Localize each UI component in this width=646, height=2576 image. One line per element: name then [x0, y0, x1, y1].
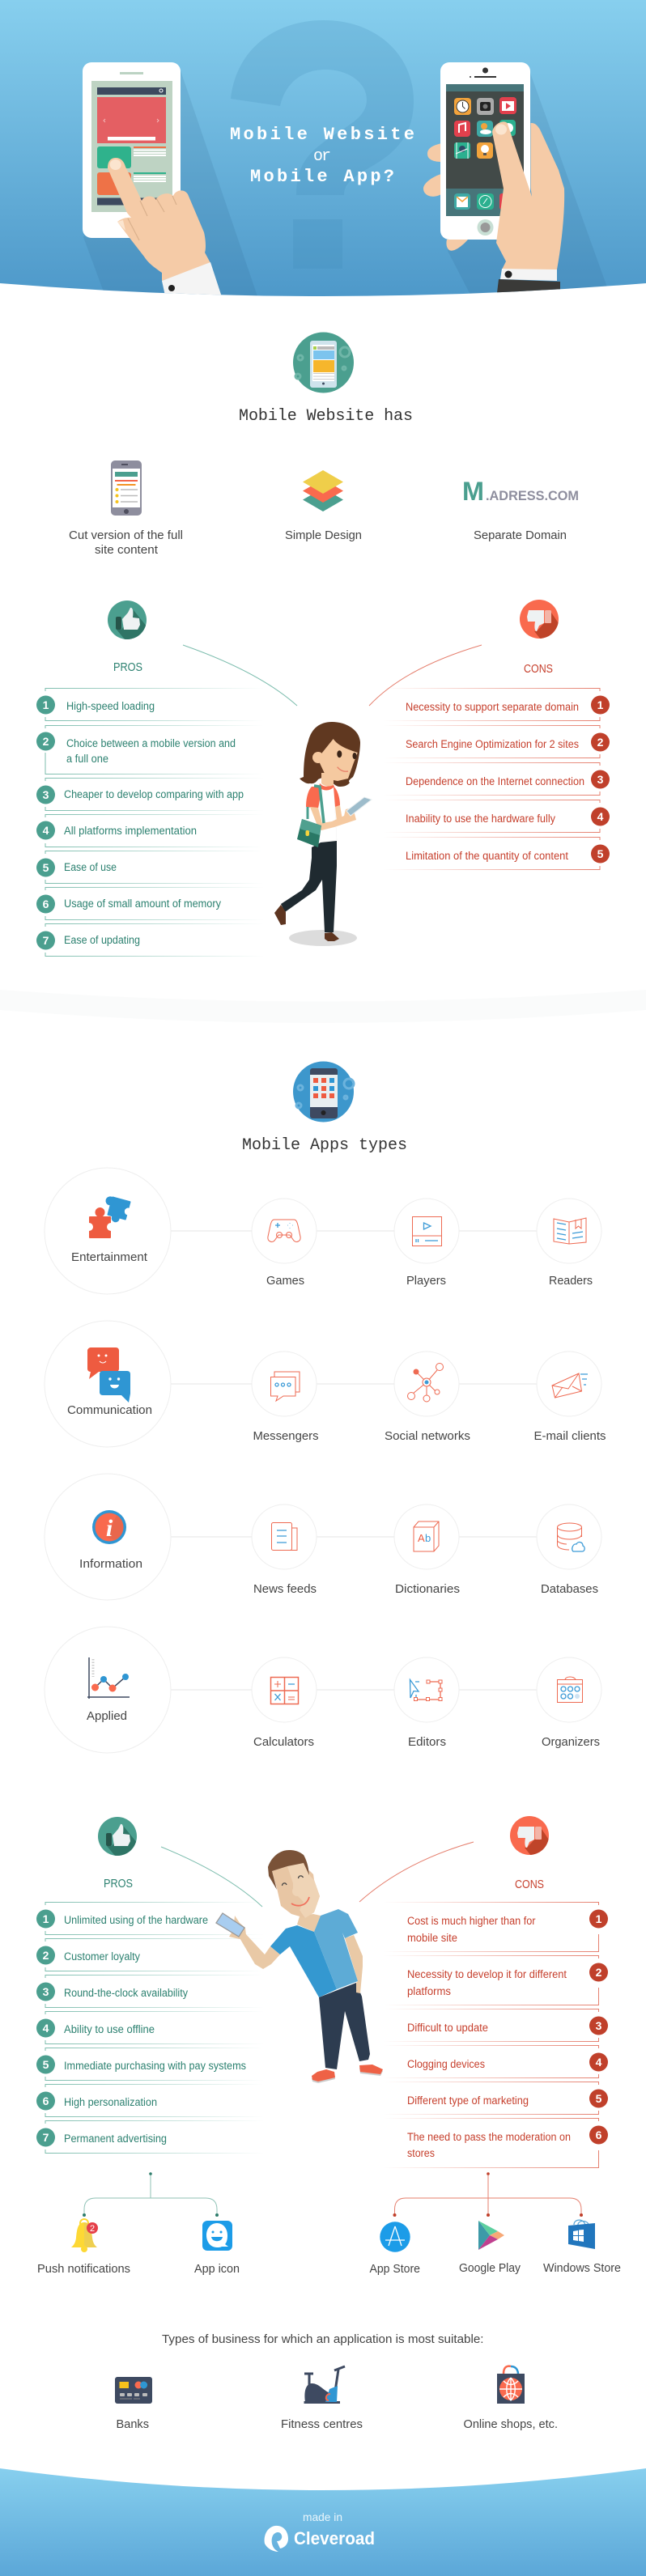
pros item 3: Round-the-clock availability [64, 1987, 188, 1999]
arrow: cons curve [369, 645, 482, 706]
heading: Mobile Website has [239, 407, 413, 426]
pros item 2: 2 [43, 1949, 49, 1962]
icon: website phone badge [293, 332, 354, 393]
cons item 6: stores [407, 2147, 435, 2159]
pros item 3: 3 [43, 788, 49, 801]
heading: cons: CONS [524, 662, 553, 676]
arrow: pros curve [161, 1847, 262, 1907]
icon: organizer [557, 1677, 583, 1703]
logo: cleveroad [265, 2526, 375, 2552]
icon: stacked diamonds [303, 470, 343, 511]
row: communication [45, 1321, 606, 1447]
pros item 4 [36, 2012, 264, 2044]
panel: website pros [36, 601, 297, 957]
icon: database cloud [557, 1523, 584, 1551]
icon: app icon [202, 2221, 232, 2251]
icon: news feed [272, 1523, 297, 1551]
label: entertainment: Entertainment [71, 1250, 148, 1264]
heading: pros: PROS [113, 660, 142, 674]
label: windows store: Windows Store [543, 2261, 621, 2275]
arrow: cons curve [359, 1842, 474, 1902]
cons item 4: 4 [597, 810, 604, 823]
cons item 1: 1 [596, 1912, 602, 1925]
pros item 3: 3 [43, 1985, 49, 1998]
pros item 5: 5 [43, 861, 49, 874]
pros item 2 [36, 725, 264, 774]
panel: app stores tree right [369, 2172, 621, 2276]
cons item 4 [383, 2046, 608, 2078]
label: news feeds: News feeds [253, 1582, 317, 1596]
big question mark [231, 20, 414, 189]
cons item 2 [383, 725, 610, 758]
left phone [83, 62, 181, 238]
icon: chat bubbles [87, 1347, 130, 1403]
pros item 7 [36, 2120, 264, 2153]
icon: messengers [270, 1372, 300, 1401]
cons item 2: 2 [596, 1966, 602, 1979]
icon: thumbs up [108, 601, 147, 639]
cons item 3: Dependence on the Internet connection [406, 775, 584, 787]
cons item 3: 3 [596, 2019, 602, 2032]
pros item 6: 6 [43, 898, 49, 910]
label: online shops: Online shops, etc. [463, 2417, 558, 2431]
cons item 3 [383, 762, 610, 795]
cons item 6: 6 [596, 2128, 602, 2141]
pros item 6: High personalization [64, 2096, 157, 2108]
cons item 4: Inability to use the hardware fully [406, 813, 555, 825]
decorative section separator [0, 990, 646, 1023]
business types intro: Types of business for which an application is most suitable: [162, 2332, 484, 2346]
illustration: man with phone [216, 1850, 383, 2083]
cons item 1 [383, 688, 610, 720]
pros item 2 [36, 1939, 264, 1971]
label: google play: Google Play [459, 2261, 521, 2275]
cons item 1: 1 [597, 698, 604, 711]
cons item 2: Necessity to develop it for different [407, 1968, 567, 1980]
pros item 6 [36, 2085, 264, 2117]
cons item 5: 5 [597, 847, 604, 860]
pros item 1: 1 [43, 698, 49, 711]
label: simple design: Simple Design [285, 528, 362, 542]
heading: pros: PROS [104, 1877, 133, 1891]
pros item 5: Immediate purchasing with pay systems [64, 2060, 246, 2072]
pros item 4 [36, 814, 264, 847]
icon: domain wordmark: .ADRESS.COM [486, 488, 579, 503]
label: editors: Editors [408, 1735, 446, 1749]
phone long shadows [83, 70, 610, 296]
hero title: Mobile App? [250, 167, 394, 187]
row: information [45, 1474, 601, 1600]
hero banner [0, 0, 646, 316]
panel: app cons [359, 1816, 608, 2167]
pros item 2: Customer loyalty [64, 1950, 140, 1963]
pros item 3 [36, 779, 264, 811]
label: players: Players [406, 1274, 446, 1288]
icon: editor selection [410, 1680, 442, 1701]
pros item 2: Choice between a mobile version and [66, 737, 236, 749]
cons item 5 [383, 837, 610, 869]
icon: thumbs down [510, 1816, 549, 1855]
icon: dictionary [414, 1521, 439, 1551]
cons item 3: 3 [597, 773, 604, 786]
cons item 5: Different type of marketing [407, 2094, 529, 2107]
label: information: Information [79, 1557, 142, 1571]
icon: exercise bike [304, 2366, 345, 2404]
label: push notifications: Push notifications [37, 2262, 130, 2276]
pros item 4: All platforms implementation [64, 825, 197, 837]
panel: website cons [369, 600, 610, 869]
connector tree [83, 2172, 219, 2217]
panel: app promotion tree left [37, 2172, 240, 2276]
heading: cons: CONS [515, 1878, 544, 1891]
label: separate domain: Separate Domain [474, 528, 567, 542]
icon: gamepad [268, 1220, 300, 1241]
icon: book reader [554, 1218, 586, 1244]
pros item 4: Ability to use offline [64, 2023, 155, 2035]
panel: business types [115, 2366, 558, 2431]
icon: info badge [92, 1510, 126, 1544]
pros item 7: Ease of updating [64, 934, 140, 946]
icon: thumbs down [520, 600, 559, 639]
cons item 2 [383, 1955, 608, 2005]
icon: calculator [270, 1677, 298, 1704]
pros item 7: Permanent advertising [64, 2133, 167, 2145]
pros item 2: 2 [43, 735, 49, 748]
hero title: or [313, 147, 331, 166]
label: email clients: E-mail clients [534, 1429, 606, 1443]
row: entertainment [45, 1168, 601, 1294]
pros item 6: 6 [43, 2094, 49, 2107]
pros item 5 [36, 2048, 264, 2080]
left hand [108, 158, 223, 299]
pros item 4: 4 [43, 824, 49, 837]
icon: puzzle [85, 1195, 134, 1238]
icon: bell: 2 [90, 2224, 95, 2234]
cons item 1: mobile site [407, 1932, 457, 1944]
icon: google play [478, 2221, 504, 2250]
icon: windows store [568, 2220, 595, 2249]
pros item 5 [36, 851, 264, 884]
pros item 7: 7 [43, 2131, 49, 2144]
cons item 6: The need to pass the moderation on [407, 2131, 571, 2143]
logo: cleveroad: Cleveroad [294, 2528, 375, 2548]
icon: online shop bag [497, 2366, 525, 2404]
label: organizers: Organizers [542, 1735, 600, 1749]
cons item 5: 5 [596, 2092, 602, 2105]
icon: cut version phone [111, 460, 142, 516]
label: social networks: Social networks [385, 1429, 470, 1443]
arrow: pros curve [183, 645, 297, 706]
label: app icon: App icon [194, 2262, 240, 2276]
pros item 7 [36, 924, 264, 957]
cons item 5 [383, 2082, 608, 2114]
icon: mobile apps phone badge [293, 1062, 354, 1122]
made in: made in [303, 2510, 342, 2523]
label: games: Games [266, 1274, 304, 1288]
panel: app pros [36, 1817, 264, 2153]
pros item 6 [36, 887, 264, 919]
icon: bank card [115, 2377, 152, 2404]
icon: media player [413, 1217, 442, 1246]
label: communication: Communication [67, 1403, 152, 1417]
row: applied [45, 1627, 601, 1753]
hero title [230, 125, 414, 187]
cons item 1 [383, 1902, 608, 1952]
label: cut version: Cut version of the full [69, 528, 183, 542]
label: dictionaries: Dictionaries [395, 1582, 460, 1596]
label: calculators: Calculators [253, 1735, 314, 1749]
connector tree [393, 2172, 583, 2217]
icon: domain wordmark [462, 477, 579, 506]
cons item 4 [383, 800, 610, 832]
label: readers: Readers [549, 1274, 593, 1288]
label: applied: Applied [87, 1709, 127, 1723]
pros item 3: Cheaper to develop comparing with app [64, 788, 244, 800]
illustration: girl with phone [274, 722, 372, 946]
icon: email [552, 1373, 588, 1398]
pros item 3 [36, 1975, 264, 2007]
label: site content: site content [95, 543, 159, 557]
icon: line chart [87, 1657, 130, 1699]
cons item 2: 2 [597, 736, 604, 749]
cons item 4: Clogging devices [407, 2058, 485, 2070]
cons item 2: platforms [407, 1985, 451, 1997]
pros item 2: a full one [66, 753, 108, 765]
pros item 4: 4 [43, 2022, 49, 2035]
app icons on phone [454, 97, 516, 210]
pros item 1 [36, 1902, 264, 1934]
cons item 5: Limitation of the quantity of content [406, 850, 568, 862]
cons item 3 [383, 2009, 608, 2041]
right phone [423, 62, 530, 251]
icon: dictionary: A [418, 1532, 425, 1544]
icon: app store [380, 2222, 410, 2252]
cons item 6 [383, 2119, 608, 2167]
cons item 1: Cost is much higher than for [407, 1915, 536, 1927]
cons item 4: 4 [596, 2056, 602, 2069]
icon: bell [71, 2219, 98, 2252]
label: databases: Databases [541, 1582, 598, 1596]
right hand [492, 121, 564, 299]
cons item 3: Difficult to update [407, 2022, 488, 2034]
heading: mobile apps types: Mobile Apps types [242, 1136, 407, 1155]
pros item 1 [36, 688, 264, 720]
cons item 1: Necessity to support separate domain [406, 701, 579, 713]
pros item 5: Ease of use [64, 861, 117, 873]
label: banks: Banks [117, 2417, 149, 2431]
icon: thumbs up [98, 1817, 137, 1856]
label: messengers: Messengers [253, 1429, 319, 1443]
hero title: Mobile Website [230, 125, 414, 145]
icon: dictionary: b [425, 1532, 431, 1544]
label: app store: App Store [369, 2262, 420, 2276]
pros item 7: 7 [43, 934, 49, 947]
pros item 1: 1 [43, 1912, 49, 1925]
footer [0, 2468, 646, 2576]
icon: social network [408, 1363, 444, 1402]
cons item 2: Search Engine Optimization for 2 sites [406, 738, 579, 750]
pros item 5: 5 [43, 2058, 49, 2071]
icon: info badge: i [106, 1515, 113, 1542]
icon: domain wordmark: M [462, 477, 484, 506]
pros item 1: Unlimited using of the hardware [64, 1914, 208, 1926]
pros item 1: High-speed loading [66, 700, 155, 712]
pros item 6: Usage of small amount of memory [64, 898, 221, 910]
section: mobile website has [69, 332, 579, 557]
label: fitness centres: Fitness centres [281, 2417, 363, 2431]
